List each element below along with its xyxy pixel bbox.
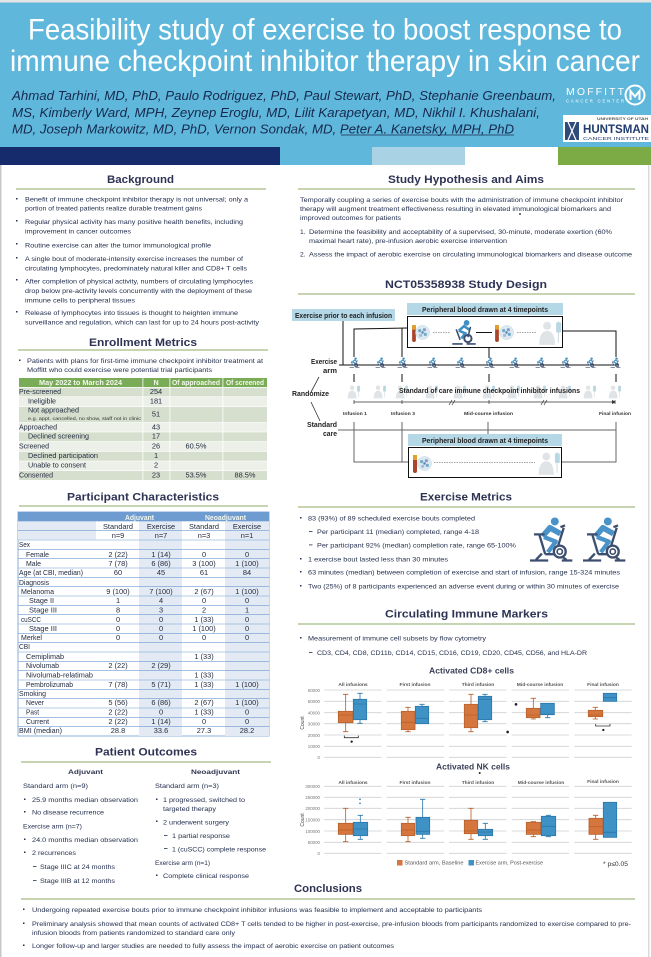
table: enrollment: Approached — [19, 423, 57, 432]
colour band — [0, 147, 651, 165]
logo: Moffitt Cancer Center: MOFFITT — [566, 86, 625, 98]
table: participant characteristics: 2 (29) — [151, 661, 171, 670]
table: participant characteristics: 7 (78) — [108, 559, 128, 568]
table: participant characteristics: Past — [26, 708, 39, 716]
table: participant characteristics: 5 (71) — [151, 680, 171, 689]
table: participant characteristics: 2 — [202, 606, 206, 614]
table: participant characteristics: 2 (67) — [194, 698, 214, 707]
table: participant characteristics: 2 (67) — [194, 587, 214, 596]
text block: background bullets: surveillance and regulation, which can last for up to 24 hours post-activity — [25, 320, 260, 326]
table: participant characteristics: 1 (33) — [194, 680, 214, 689]
chart: activated CD8+ cells: All infusions — [338, 682, 368, 688]
chart: activated CD8+ cells — [300, 667, 632, 760]
table: enrollment: 1 — [154, 451, 158, 460]
table: enrollment: Of approached — [172, 378, 220, 387]
chart: activated CD8+ cells: 30000 — [308, 722, 321, 726]
table: participant characteristics: 1 (100) — [235, 680, 259, 689]
table: participant characteristics: n=9 — [112, 531, 124, 540]
timeline axis — [343, 400, 631, 417]
text block: neoadjuvant outcomes: 2 underwent surgery — [163, 820, 230, 826]
text block: flow cytometry — [300, 636, 587, 657]
chart: activated NK cells: All infusions — [338, 780, 368, 786]
text block: adjuvant outcomes: Stage IIIB at 12 months — [40, 878, 116, 885]
text block: background bullets: A single bout of moderate-intensity exercise increases the number of — [25, 256, 243, 263]
table: participant characteristics: 2 (22) — [108, 708, 128, 716]
text block: background bullets: Routine exercise can alter the tumor immunological profile — [25, 242, 211, 250]
icons: infusions — [348, 385, 621, 398]
text block: aims: Determine the feasibility and acceptability of a supervised, 30-minute, moderate exertion (60% — [309, 229, 612, 236]
text block: enrollment intro: Patients with plans for first-time immune checkpoint inhibitor treatment at — [27, 358, 263, 365]
table: participant characteristics: 0 — [245, 550, 249, 559]
table: participant characteristics: Current — [26, 717, 49, 726]
table: participant characteristics: 28.2 — [240, 726, 254, 735]
text block: adjuvant outcomes — [23, 769, 138, 885]
table: enrollment: N — [154, 378, 159, 387]
logo: Huntsman Cancer Institute: CANCER INSTITUTE — [583, 136, 649, 141]
title — [10, 14, 640, 78]
table: participant characteristics: Stage II — [29, 596, 54, 605]
table: participant characteristics: cuSCC — [21, 615, 41, 624]
title: Feasibility study of exercise to boost response to — [28, 14, 622, 46]
table: participant characteristics: 0 — [159, 624, 163, 633]
chart: activated NK cells: 100000 — [305, 829, 321, 834]
table: participant characteristics: 1 (100) — [235, 587, 259, 596]
table: participant characteristics: 0 — [245, 624, 249, 633]
timeline axis: Infusion 3 — [391, 411, 415, 417]
table: participant characteristics: 61 — [200, 568, 208, 577]
text block: exercise metrics bullets: Per participant 11 (median) completed, range 4-18 — [317, 529, 479, 536]
table: enrollment: 181 — [150, 397, 162, 406]
table: participant characteristics: CBI — [19, 642, 30, 651]
table: enrollment: 254 — [150, 387, 162, 396]
table: participant characteristics: Standard — [103, 522, 133, 531]
callout: standard arm blood draw — [408, 434, 562, 478]
table: participant characteristics: 0 — [159, 708, 163, 716]
legend: * p≤0.05 — [603, 861, 628, 868]
table: participant characteristics: 1 (14) — [151, 550, 171, 559]
text block: adjuvant outcomes: Standard arm (n=9) — [23, 783, 88, 790]
logo: Huntsman Cancer Institute — [563, 115, 651, 142]
chart: activated NK cells: 250000 — [305, 795, 321, 800]
logo: Moffitt Cancer Center: CANCER CENTER — [566, 98, 624, 104]
text block: conclusions bullets — [23, 907, 631, 950]
text block: neoadjuvant outcomes: 1 (cuSCC) complete response — [172, 846, 266, 854]
chart: activated CD8+ cells: Third infusion — [462, 682, 494, 688]
chart: activated NK cells: 0 — [318, 851, 321, 856]
table: participant characteristics: 7 (78) — [108, 680, 128, 689]
timeline axis: Mid-course infusion — [464, 411, 513, 417]
table: enrollment: Declined screening — [28, 432, 89, 441]
table: participant characteristics: Standard — [189, 522, 219, 531]
table: participant characteristics: Diagnosis — [19, 578, 49, 587]
table: participant characteristics: Smoking — [19, 689, 46, 698]
table: participant characteristics: Exercise — [147, 522, 175, 531]
label: exercise arm: Exercise — [311, 359, 337, 366]
table: participant characteristics: 1 (14) — [151, 717, 171, 726]
table: enrollment: 26 — [152, 442, 160, 451]
chart: activated CD8+ cells: 10000 — [308, 744, 321, 749]
table: participant characteristics: 2 (22) — [108, 550, 128, 559]
table: participant characteristics: Neoadjuvant — [205, 513, 247, 522]
table: participant characteristics: 8 — [116, 606, 120, 614]
panel: exercise metrics — [298, 492, 635, 591]
connectors: exercise arm — [339, 321, 618, 382]
chart: activated NK cells: Count — [300, 813, 306, 827]
text block: adjuvant outcomes: Adjuvant — [68, 769, 104, 776]
text block: exercise metrics bullets: 1 exercise bout lasted less than 30 minutes — [308, 557, 449, 564]
table: participant characteristics: 0 — [116, 624, 120, 633]
chart: activated NK cells: Activated NK cells — [436, 763, 511, 772]
legend: Standard arm, Baseline — [404, 860, 464, 866]
table: participant characteristics: Melanoma — [21, 587, 54, 596]
icons: exercise sessions — [350, 357, 620, 368]
text block: adjuvant outcomes: 25.9 months median observation — [32, 797, 138, 804]
label: standard care — [307, 422, 337, 438]
panel: enrollment metrics — [18, 337, 268, 480]
text block: background bullets: Release of lymphocytes into tissues is thought to heighten immune — [25, 310, 238, 317]
panel: background — [16, 174, 266, 326]
title: immune checkpoint inhibitor therapy in skin cancer — [10, 45, 640, 78]
callout: exercise prior to each infusion: Exercise prior to each infusion — [295, 313, 392, 320]
panel: study hypothesis and aims — [298, 174, 635, 258]
table: participant characteristics: 45 — [157, 568, 165, 577]
table: participant characteristics: n=3 — [198, 531, 210, 540]
text block: hypothesis: therapy will augment treatment effectiveness resulting in elevated immunological biomarkers and — [300, 206, 611, 213]
text block: exercise metrics bullets: 63 minutes (median) between completion of exercise and start of infusion, range 15-324 minutes — [308, 570, 621, 577]
table: enrollment: 43 — [152, 423, 160, 432]
text block: hypothesis — [300, 197, 624, 222]
table: participant characteristics: 1 (33) — [194, 615, 214, 624]
text block: background bullets: After completion of physical activity, numbers of circulating lymphocytes — [25, 278, 254, 286]
table: participant characteristics: 0 — [202, 596, 206, 605]
chart: activated NK cells: 50000 — [308, 840, 321, 845]
table: enrollment: Pre-screened — [19, 387, 61, 396]
table: enrollment: Consented — [19, 470, 53, 479]
chart: activated CD8+ cells: Activated CD8+ cells — [429, 667, 515, 676]
legend: Exercise arm, Post-exercise — [476, 860, 543, 866]
timeline axis: Final infusion — [599, 411, 631, 417]
table: participant characteristics: 1 (100) — [192, 624, 216, 633]
text block: exercise metrics bullets: Per participant 92% (median) completion rate, range 65-100% — [317, 543, 516, 550]
table: enrollment: Unable to consent — [28, 461, 86, 470]
text block: neoadjuvant outcomes: targeted therapy — [163, 806, 217, 813]
heading: study design: NCT05358938 Study Design — [385, 279, 547, 291]
legend — [397, 860, 628, 868]
table: participant characteristics: Merkel — [21, 633, 42, 642]
table: participant characteristics: Female — [26, 550, 49, 559]
logo: Moffitt Cancer Center — [566, 86, 644, 104]
text block: background bullets — [16, 196, 260, 326]
table: participant characteristics: 28.8 — [111, 726, 125, 735]
table: enrollment: 88.5% — [235, 470, 256, 479]
table: participant characteristics: Cemiplimab — [26, 652, 64, 661]
table: participant characteristics: 5 (56) — [108, 698, 128, 707]
table: participant characteristics: 1 (33) — [194, 652, 214, 661]
connectors: standard care arm — [338, 422, 616, 462]
panel: participant characteristics — [18, 492, 269, 736]
chart: activated CD8+ cells: Final infusion — [587, 682, 619, 688]
table: participant characteristics: 9 (100) — [106, 587, 130, 596]
table: participant characteristics: 0 — [116, 633, 120, 642]
text block: neoadjuvant outcomes: Exercise arm (n=1) — [155, 860, 210, 867]
table: participant characteristics: Male — [26, 559, 41, 568]
heading: study hypothesis and aims: Study Hypothesis and Aims — [388, 174, 544, 186]
text block: neoadjuvant outcomes: Neoadjuvant — [191, 769, 241, 776]
authors: MS, Kimberly Ward, MPH, Zeynep Eroglu, MD, Lilit Karapetyan, MD, Nikhil I. Khushalani, — [12, 105, 540, 120]
text block: background bullets: drop below pre-activity levels concurrently with the deployment of these — [25, 288, 252, 295]
chart: activated CD8+ cells: 60000 — [308, 688, 321, 693]
table: participant characteristics: 1 — [116, 596, 120, 605]
table: enrollment: 23 — [152, 470, 160, 479]
table: participant characteristics: Nivolumab-relatimab — [26, 670, 93, 680]
icon: exercise bike 2 — [583, 518, 625, 561]
text block: aims: Assess the impact of aerobic exercise on circulating immunological biomarkers and disease outcome — [309, 252, 632, 258]
label: randomize: Randomize — [292, 391, 329, 398]
table: participant characteristics: 0 — [159, 633, 163, 642]
text block: exercise metrics bullets — [300, 516, 621, 591]
chart: activated CD8+ cells: 20000 — [308, 733, 321, 738]
table: participant characteristics: 0 — [245, 596, 249, 605]
text block: hypothesis: Temporally coupling a series of exercise bouts with the administration of immune checkpoint inhibitor — [300, 197, 624, 204]
text block: adjuvant outcomes: Exercise arm (n=7) — [23, 824, 82, 830]
text block: aims: 1. — [300, 229, 306, 236]
text block: background bullets: Benefit of immune checkpoint inhibitor therapy is not universal; only a — [25, 196, 248, 204]
table: participant characteristics: 1 (33) — [194, 708, 214, 716]
text block: aims: maximal heart rate), pre-infusion aerobic exercise intervention — [309, 238, 507, 245]
text block: adjuvant outcomes: Stage IIIC at 24 months — [40, 864, 116, 871]
heading: background: Background — [107, 174, 174, 186]
table: participant characteristics: n=7 — [155, 531, 167, 540]
table: participant characteristics: 1 (100) — [235, 559, 259, 568]
callout: exercise arm blood draw — [407, 303, 563, 348]
table: enrollment: e.g. appt. cancelled, no show, staff not in clinic — [28, 416, 142, 421]
text block: background bullets: improvement in cancer outcomes — [25, 228, 132, 236]
table: enrollment: 2 — [154, 461, 158, 470]
heading: patient outcomes: Patient Outcomes — [95, 747, 197, 759]
table: participant characteristics: Exercise — [233, 522, 261, 531]
table: participant characteristics: 0 — [202, 717, 206, 726]
table: participant characteristics: 0 — [202, 633, 206, 642]
text block: aims: 2. — [300, 252, 306, 258]
table: participant characteristics: 0 — [202, 550, 206, 559]
panel: patient outcomes — [21, 747, 271, 885]
table: participant characteristics: 2 (22) — [108, 661, 128, 670]
table: participant characteristics: Stage III — [29, 606, 57, 614]
text block: neoadjuvant outcomes: 1 progressed, switched to — [163, 797, 245, 804]
text block: neoadjuvant outcomes: Standard arm (n=3) — [155, 783, 219, 790]
table: participant characteristics: 0 — [245, 708, 249, 716]
panel: study design — [292, 279, 635, 478]
label: standard of care infusions: Standard of care immune checkpoint inhibitor infusions — [399, 388, 580, 395]
table: participant characteristics: 3 (100) — [192, 559, 216, 568]
text block: conclusions bullets: Undergoing repeated exercise bouts prior to immune checkpoint inhibitor infusions was feasible to implement and acceptable to participants — [32, 907, 483, 914]
table: participant characteristics: 33.6 — [154, 726, 168, 735]
heading: exercise metrics: Exercise Metrics — [420, 492, 512, 504]
authors: Ahmad Tarhini, MD, PhD, Paulo Rodriguez, PhD, Paul Stewart, PhD, Stephanie Greenbaum, — [11, 88, 556, 103]
table: participant characteristics: 0 — [116, 615, 120, 624]
icon: exercise bike 1 — [530, 518, 572, 561]
chart: activated NK cells: Third infusion — [462, 780, 494, 786]
timeline axis: Infusion 1 — [343, 411, 367, 417]
chart: activated NK cells: 150000 — [305, 818, 321, 822]
table: participant characteristics: 4 — [159, 596, 163, 605]
table: participant characteristics: Age (at CBI, median) — [19, 568, 83, 577]
table: enrollment: Declined participation — [28, 451, 98, 460]
text block: adjuvant outcomes: No disease recurrence — [32, 810, 104, 816]
table: participant characteristics: Stage III — [29, 624, 57, 633]
table: participant characteristics: Never — [26, 698, 45, 707]
text block: neoadjuvant outcomes: 1 partial response — [172, 833, 230, 840]
chart: activated CD8+ cells: 40000 — [308, 710, 321, 716]
heading: enrollment metrics: Enrollment Metrics — [89, 337, 197, 349]
logo: Huntsman Cancer Institute: UNIVERSITY OF UTAH — [597, 117, 648, 121]
text block: conclusions bullets: Preliminary analysis showed that mean counts of activated CD8+ T cells tended to be higher in post-exercise, pre-infusion bloods from participants randomized to exercise compared to pre- — [32, 921, 631, 928]
table: enrollment: Of screened — [226, 378, 264, 387]
table: participant characteristics: 0 — [245, 615, 249, 624]
text block: neoadjuvant outcomes — [155, 769, 266, 880]
table: participant characteristics: 2 (22) — [108, 717, 128, 726]
heading: conclusions: Conclusions — [294, 883, 362, 895]
text block: hypothesis: improved outcomes for patients — [300, 215, 402, 222]
table: enrollment: 53.5% — [186, 470, 207, 479]
chart: activated CD8+ cells: First infusion — [400, 682, 430, 688]
text block: background bullets: Regular physical activity has many positive health benefits, including — [25, 219, 243, 226]
table: participant characteristics: BMI (median) — [19, 726, 62, 735]
table: enrollment: 51 — [152, 410, 160, 419]
table: participant characteristics: Sex — [19, 540, 30, 549]
table: participant characteristics — [18, 512, 269, 736]
table: participant characteristics: 27.3 — [197, 726, 211, 735]
table: participant characteristics: 1 (100) — [235, 698, 259, 707]
callout: standard arm blood draw: Peripheral blood drawn at 4 timepoints — [422, 438, 548, 445]
text block: conclusions bullets: Longer follow-up and larger studies are needed to fully assess the impact of aerobic exercise on patient outcomes — [32, 943, 395, 950]
callout: exercise arm blood draw: Peripheral blood drawn at 4 timepoints — [422, 307, 548, 314]
text block: enrollment intro: Moffitt who could exercise were potential trial participants — [27, 367, 213, 374]
table: participant characteristics: Adjuvant — [125, 513, 155, 522]
chart: activated CD8+ cells: Mid-course infusion — [517, 682, 563, 688]
authors: MD, Joseph Markowitz, MD, PhD, Vernon Sondak, MD, Peter A. Kanetsky, MPH, PhD — [12, 122, 514, 136]
chart: activated NK cells: Mid-course infusion — [518, 780, 564, 786]
table: participant characteristics: Nivolumab — [26, 661, 59, 670]
text block: flow cytometry: CD3, CD4, CD8, CD11b, CD14, CD15, CD16, CD19, CD20, CD45, CD56, and HLA-DR — [317, 650, 587, 657]
text block: background bullets: circulating lymphocytes, predominately natural killer and CD8+ T cells — [25, 266, 248, 272]
text block: adjuvant outcomes: 24.0 months median observation — [32, 837, 138, 844]
table: enrollment: Not approached — [28, 406, 79, 415]
chart: activated NK cells — [300, 763, 632, 868]
table: enrollment: Ineligible — [28, 397, 56, 406]
text block: enrollment intro — [19, 358, 263, 374]
table: enrollment: Screened — [19, 442, 49, 451]
text block: background bullets: immune cells to peripheral tissues — [25, 298, 136, 304]
panel: conclusions — [21, 883, 635, 950]
table: participant characteristics: 6 (86) — [151, 559, 171, 568]
table: participant characteristics: 0 — [245, 633, 249, 642]
heading: participant characteristics: Participant Characteristics — [67, 492, 219, 504]
table: participant characteristics: 1 (33) — [194, 670, 214, 680]
table: participant characteristics: 1 — [245, 606, 249, 614]
label: randomize — [292, 377, 329, 421]
authors — [11, 88, 556, 136]
table: participant characteristics: 0 — [245, 717, 249, 726]
table: participant characteristics: n=1 — [241, 531, 253, 540]
text block: neoadjuvant outcomes: Complete clinical response — [163, 873, 249, 880]
header banner — [0, 2, 651, 148]
chart: activated NK cells: 300000 — [305, 784, 321, 789]
text block: aims — [300, 229, 632, 258]
table: participant characteristics: 84 — [243, 568, 251, 577]
table: enrollment: 17 — [152, 432, 160, 441]
diagram: study design — [292, 303, 631, 478]
chart: activated NK cells: First infusion — [400, 780, 430, 786]
table: participant characteristics: 3 — [159, 606, 163, 614]
chart: activated NK cells: Final infusion — [587, 779, 619, 785]
label: standard care: care — [323, 431, 337, 438]
table: participant characteristics: 7 (100) — [149, 587, 173, 596]
callout: exercise prior to each infusion — [292, 309, 395, 321]
label: standard care: Standard — [307, 422, 337, 429]
panel: circulating immune markers — [298, 609, 635, 868]
text block: conclusions bullets: infusion bloods from patients randomized to standard care only — [32, 930, 236, 937]
text block: flow cytometry: Measurement of immune cell subsets by flow cytometry — [308, 636, 487, 643]
text block: background bullets: portion of treated patients realize durable treatment gains — [25, 206, 203, 212]
table: participant characteristics: Pembrolizumab — [26, 680, 73, 689]
table: participant characteristics: 6 (86) — [151, 698, 171, 707]
text block: exercise metrics bullets: 83 (93%) of 89 scheduled exercise bouts completed — [308, 516, 475, 523]
table: participant characteristics: 60 — [114, 568, 122, 577]
table: participant characteristics: 0 — [159, 615, 163, 624]
chart: activated CD8+ cells: 50000 — [308, 699, 321, 704]
table: enrollment — [19, 378, 267, 480]
chart: activated NK cells: 200000 — [305, 806, 321, 811]
table: enrollment: 60.5% — [186, 442, 207, 451]
heading: circulating immune markers: Circulating Immune Markers — [385, 609, 548, 621]
label: exercise arm — [311, 359, 337, 375]
chart: activated CD8+ cells: 0 — [318, 755, 321, 760]
table: enrollment: May 2022 to March 2024 — [39, 378, 122, 387]
text block: exercise metrics bullets: Two (25%) of 8 participants experienced an adverse event during or within 30 minutes of exercise — [308, 584, 619, 591]
label: exercise arm: arm — [323, 368, 337, 375]
logo: Huntsman Cancer Institute: HUNTSMAN — [583, 122, 649, 136]
text block: adjuvant outcomes: 2 recurrences — [32, 850, 77, 857]
chart: activated CD8+ cells: Count — [300, 716, 306, 730]
